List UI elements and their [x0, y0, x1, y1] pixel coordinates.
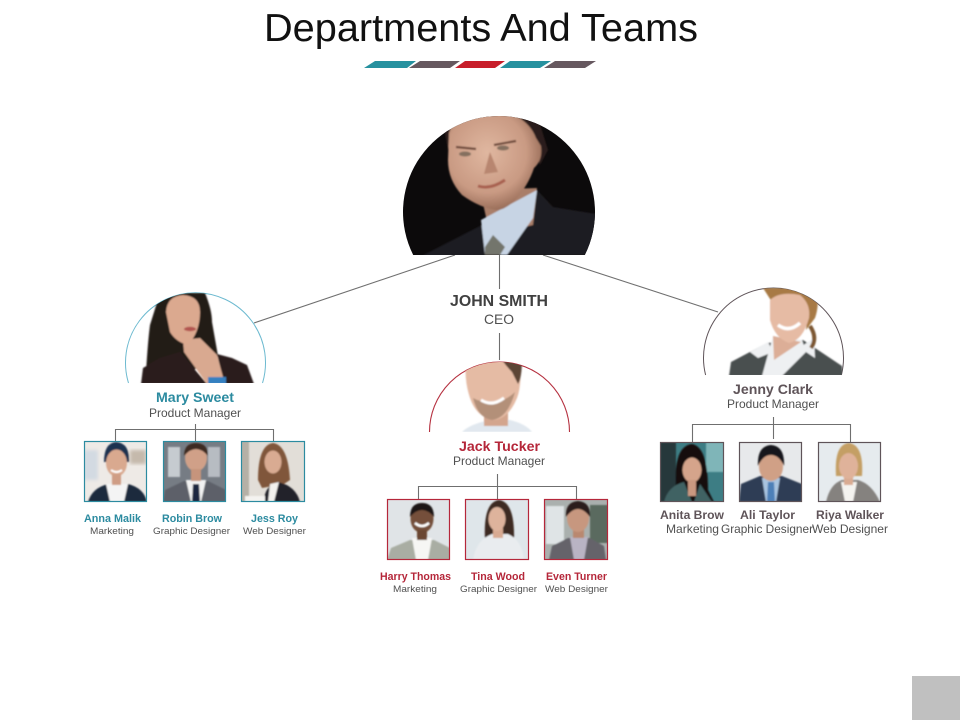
photo: Jess Roy — [241, 441, 305, 502]
name: John Smith: JOHN SMITH — [450, 293, 548, 310]
panel: Mary Sweet team — [84, 293, 306, 537]
label: Even Turner: Even Turner — [546, 571, 608, 583]
photo: John Smith — [400, 114, 600, 262]
label: Jess Roy: Jess Roy — [251, 513, 299, 525]
photo: Anna Malik — [84, 441, 147, 502]
label: Ali Taylor — [721, 508, 813, 536]
label: Riya Walker — [812, 508, 888, 536]
label: Robin Brow: Robin Brow — [162, 513, 222, 525]
label: Even Turner: Web Designer — [545, 584, 608, 595]
role: Product Manager: Product Manager — [453, 454, 545, 468]
name: Mary Sweet: Mary Sweet — [156, 389, 234, 405]
label: Riya Walker: Web Designer — [812, 522, 888, 536]
label: Anita Brow — [660, 508, 725, 536]
label: Tina Wood: Graphic Designer — [460, 584, 537, 595]
photo: Jack Tucker — [462, 358, 532, 432]
label: Harry Thomas: Marketing — [393, 584, 437, 595]
panel: Jenny Clark team — [660, 288, 888, 536]
photo: Robin Brow — [163, 441, 226, 502]
role: Product Manager: Product Manager — [149, 406, 241, 420]
label: Harry Thomas — [380, 571, 451, 595]
label: Jess Roy: Web Designer — [243, 526, 306, 537]
label: Jess Roy — [243, 513, 306, 537]
label: Harry Thomas: Harry Thomas — [380, 571, 451, 583]
label: Riya Walker: Riya Walker — [816, 508, 884, 522]
title underline: five slanted bars — [364, 61, 596, 68]
photo: Ali Taylor — [739, 442, 802, 502]
label: Robin Brow — [153, 513, 230, 537]
photo: Tina Wood — [465, 499, 529, 560]
manager arc — [125, 293, 265, 383]
label: Even Turner — [545, 571, 608, 595]
photo: Mary Sweet — [141, 293, 254, 384]
label: Robin Brow: Graphic Designer — [153, 526, 230, 537]
team connector — [692, 417, 850, 442]
photo: Jenny Clark — [729, 288, 843, 376]
label: Anna Malik: Anna Malik — [84, 513, 142, 525]
team connector — [418, 474, 576, 499]
manager arc — [430, 362, 570, 432]
panel: CEO — [400, 114, 600, 327]
corner square — [912, 676, 960, 720]
panel: Jack Tucker team — [380, 358, 608, 595]
role: CEO: CEO — [484, 311, 514, 327]
label: Anita Brow: Anita Brow — [660, 508, 725, 522]
label: Anna Malik: Marketing — [90, 526, 134, 537]
photo: Even Turner — [544, 499, 608, 560]
label: Anita Brow: Marketing — [666, 522, 719, 536]
photo: Anita Brow — [660, 442, 724, 502]
label: Anna Malik — [84, 513, 142, 537]
label: Tina Wood — [460, 571, 537, 595]
team connector — [116, 424, 274, 441]
name: Jenny Clark: Jenny Clark — [733, 381, 813, 397]
photo: Harry Thomas — [387, 499, 450, 560]
name: Jack Tucker: Jack Tucker — [459, 438, 541, 454]
photo: Riya Walker — [818, 442, 881, 502]
label: Tina Wood: Tina Wood — [471, 571, 525, 583]
connector lines from CEO — [254, 255, 718, 360]
manager arc — [704, 288, 844, 375]
role: Product Manager: Product Manager — [727, 397, 819, 411]
title: Departments And Teams — [264, 7, 698, 50]
label: Ali Taylor: Graphic Designer — [721, 522, 813, 536]
label: Ali Taylor: Ali Taylor — [740, 508, 795, 522]
